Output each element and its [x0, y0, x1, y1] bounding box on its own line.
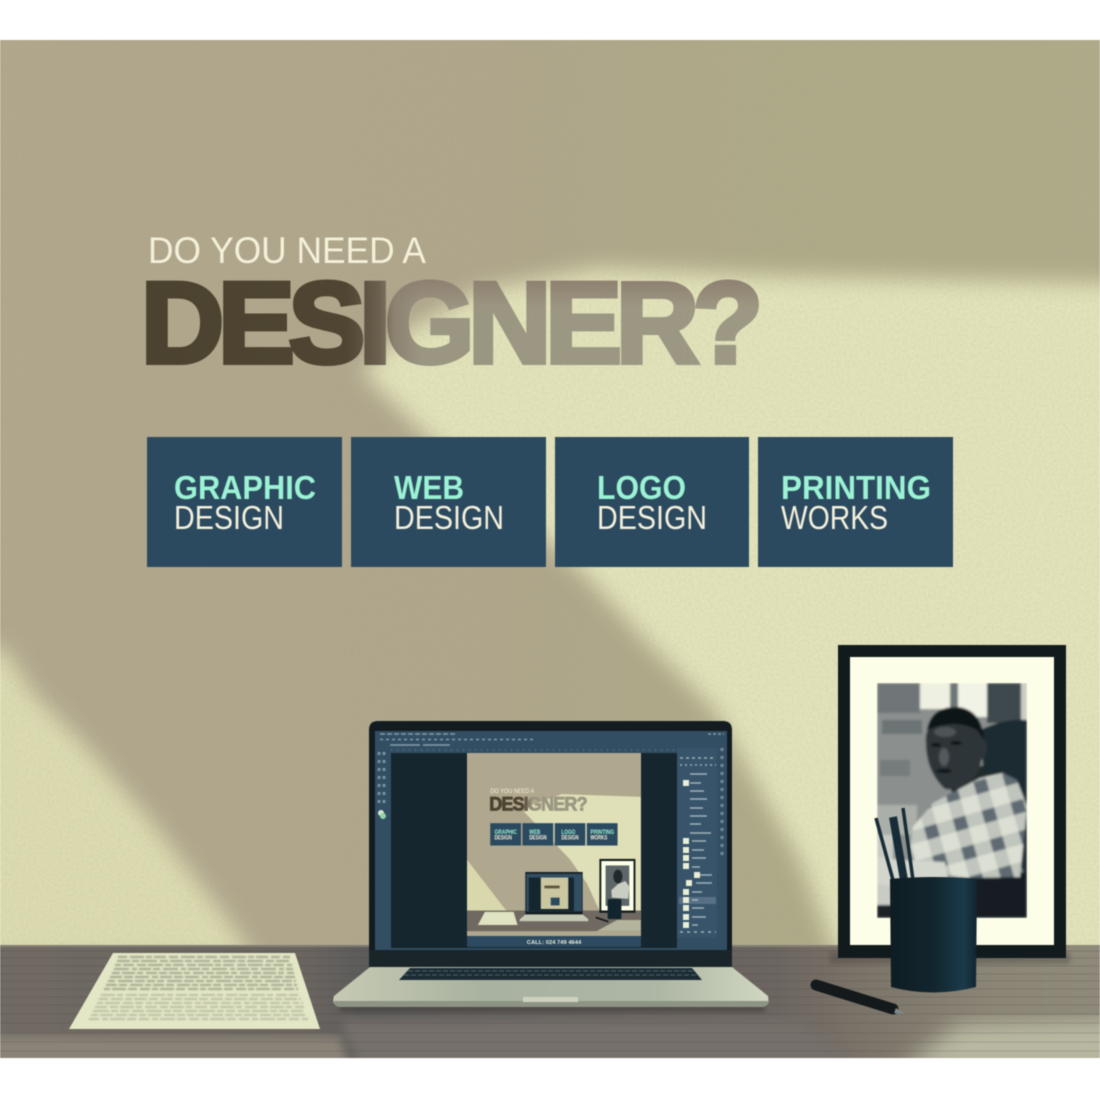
- preview laptop screen: [525, 872, 583, 914]
- pencils: [876, 808, 913, 880]
- trackpad notch: [523, 997, 578, 1002]
- service box: printing works: WORKS: [781, 499, 888, 536]
- chair: [980, 720, 1027, 880]
- photo of man in plaid shirt: [877, 683, 1027, 918]
- service box: graphic design: DESIGN: [174, 499, 284, 536]
- preview photo shirt: [611, 881, 629, 899]
- service box: web design: WEB: [394, 469, 464, 506]
- preview box labels: WEB: [529, 830, 541, 836]
- preview box labels: DESIGN: [561, 835, 579, 842]
- service box: logo design: LOGO: [597, 469, 686, 506]
- artboard footer band: CALL: 024 749 4644: [527, 940, 582, 946]
- preview desk: [467, 911, 641, 931]
- preview box labels: LOGO: [561, 830, 576, 836]
- base front edge: [334, 1001, 769, 1007]
- face: [924, 722, 983, 790]
- service box: logo design: DESIGN: [597, 499, 707, 536]
- subheading: DO YOU NEED A: [148, 230, 426, 271]
- ear: [983, 742, 987, 756]
- artboard footer band: [467, 936, 641, 947]
- preview pen: [596, 917, 608, 922]
- preview box labels: GRAPHIC: [494, 830, 518, 836]
- preview box labels: DESIGN: [494, 835, 512, 842]
- preview box labels: WORKS: [590, 835, 607, 842]
- service box: printing works: [758, 437, 953, 567]
- preview cup: [608, 899, 621, 919]
- keyboard: [399, 968, 702, 980]
- screen bezel: [369, 721, 732, 967]
- photoshop layers panel: [677, 748, 722, 938]
- pen: [816, 985, 905, 1014]
- preview frame: [599, 859, 635, 913]
- laptop base: [333, 967, 768, 1007]
- service box: printing works: PRINTING: [781, 469, 931, 506]
- preview laptop artboard: [541, 878, 568, 909]
- preview laptop ui: [526, 874, 582, 911]
- laptop shadow: [340, 1002, 765, 1012]
- photoshop menu bar: [380, 734, 724, 750]
- picture frame: [838, 645, 1066, 958]
- lower dark desk: [960, 872, 1027, 918]
- paper sheet: [69, 953, 320, 1029]
- service box: web design: DESIGN: [394, 499, 504, 536]
- photoshop tools: [378, 752, 386, 819]
- preview box labels: [494, 830, 614, 842]
- preview laptop workspace: [529, 878, 574, 911]
- service box: graphic design: [147, 437, 342, 567]
- preview desk light: [597, 920, 641, 931]
- preview box labels: PRINTING: [590, 830, 614, 836]
- photoshop window: [375, 731, 727, 950]
- bezel bottom strip: [369, 950, 732, 967]
- service box: logo design: [555, 437, 749, 567]
- pencil cup: [890, 877, 977, 992]
- heading: DESIGNER?: DESIGNER?: [141, 260, 763, 388]
- service box: web design: [351, 437, 546, 567]
- service box: graphic design: GRAPHIC: [174, 469, 316, 506]
- desk: [0, 945, 1100, 1070]
- artboard: nested design preview: [467, 753, 641, 936]
- laptop: [333, 721, 769, 1012]
- preview lower light: [467, 860, 506, 911]
- preview laptop mini icon: [551, 898, 560, 905]
- preview frame mat: [601, 861, 634, 911]
- preview photo head: [613, 870, 622, 883]
- preview boxes: [490, 823, 618, 846]
- preview subheading: DO YOU NEED A: [490, 788, 535, 795]
- preview sunlight: [524, 794, 641, 911]
- shirt: [910, 773, 1027, 878]
- preview photo: [606, 865, 629, 906]
- preview heading: DESIGNER?: [489, 794, 588, 816]
- preview box labels: DESIGN: [529, 835, 547, 842]
- preview laptop base: [520, 914, 588, 921]
- frame mat: [850, 657, 1054, 945]
- arm: [878, 858, 949, 885]
- frame shadow on desk: [830, 952, 1070, 964]
- hair: [927, 707, 984, 740]
- preview laptop mini heading: [544, 886, 560, 888]
- neck: [950, 764, 986, 794]
- photoshop workspace: [391, 753, 677, 948]
- preview paper: [478, 912, 518, 925]
